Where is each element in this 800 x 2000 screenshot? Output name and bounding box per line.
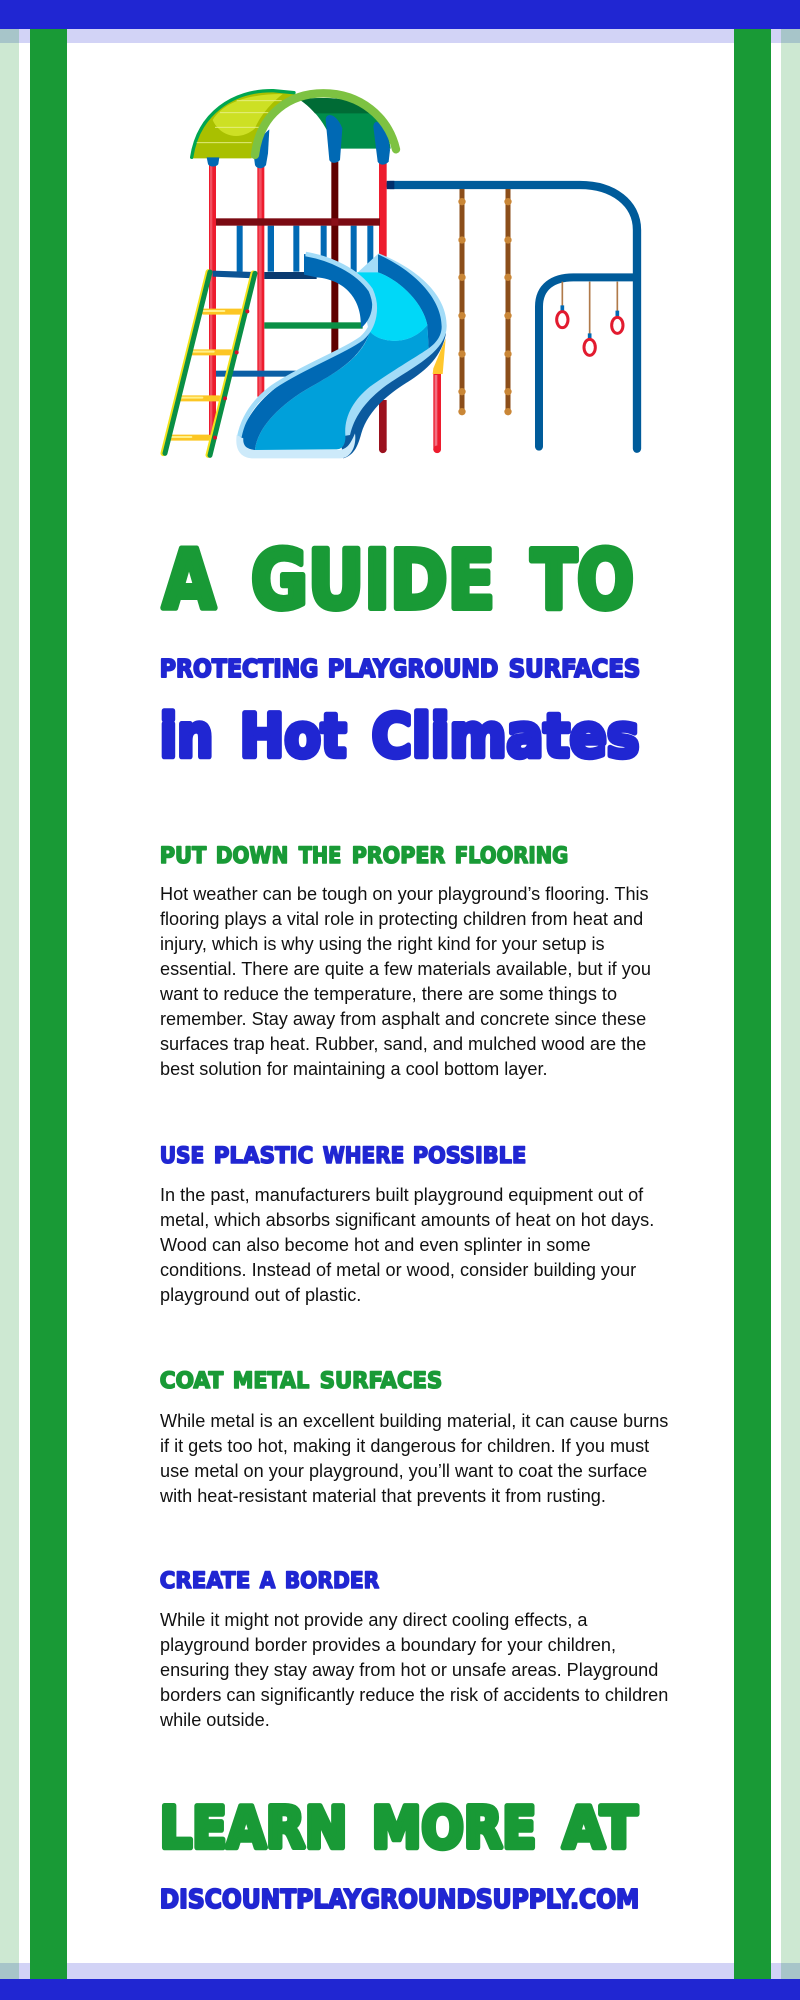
heading: Use plastic where possible <box>160 1143 526 1169</box>
icon: slide <box>236 253 447 458</box>
heading: Put down the proper flooring <box>160 843 568 869</box>
subtitle: Protecting Playground Surfaces: PLAYGROUND <box>328 654 498 683</box>
call to action: Learn more at <box>160 1795 637 1861</box>
text block: flooring: essential. There are quite a few materials available, but if you <box>160 959 651 979</box>
text block: border: while outside. <box>160 1710 270 1730</box>
text block: plastic <box>160 1185 654 1305</box>
heading: Put down the proper flooring: FLOORING <box>455 843 568 869</box>
heading: Put down the proper flooring: THE <box>299 843 341 869</box>
title: in Hot Climates: in <box>160 702 213 771</box>
text block: coat metal: use metal on your playground, you’ll want to coat the surface <box>160 1461 647 1481</box>
text block: coat metal: While metal is an excellent building material, it can cause burns <box>160 1411 668 1431</box>
icon: canopy <box>192 91 396 168</box>
heading: Coat metal surfaces: COAT <box>160 1368 224 1394</box>
heading: Use plastic where possible: PLASTIC <box>214 1143 313 1169</box>
call to action: Learn more at: LEARN <box>160 1795 347 1861</box>
icon: swing frame <box>387 185 637 449</box>
call to action: Learn more at: AT <box>563 1795 637 1861</box>
title: A GUIDE TO: GUIDE <box>251 534 495 628</box>
website address: DISCOUNTPLAYGROUNDSUPPLY.COM <box>160 1885 639 1915</box>
text block: border <box>160 1610 668 1730</box>
text block: plastic: Wood can also become hot and even splinter in some <box>160 1235 591 1255</box>
text block: plastic: In the past, manufacturers built playground equipment out of <box>160 1185 643 1205</box>
text block: coat metal: if it gets too hot, making it dangerous for children. If you must <box>160 1436 649 1456</box>
title: in Hot Climates <box>160 702 639 771</box>
icon: tower posts and rails <box>209 162 441 453</box>
text block: coat metal: with heat-resistant material that prevents it from rusting. <box>160 1486 606 1506</box>
text block: flooring: remember. Stay away from asphalt and concrete since these <box>160 1009 646 1029</box>
text block: flooring: want to reduce the temperature, there are some things to <box>160 984 617 1004</box>
text block: border: playground border provides a boundary for your children, <box>160 1635 616 1655</box>
text block: plastic: playground out of plastic. <box>160 1285 361 1305</box>
text block: border: While it might not provide any direct cooling effects, a <box>160 1610 587 1630</box>
text block: flooring: injury, which is why using the right kind for your setup is <box>160 934 605 954</box>
text block: flooring <box>160 884 651 1079</box>
subtitle: Protecting Playground Surfaces: PROTECTING <box>160 654 318 683</box>
title: in Hot Climates: Hot <box>240 702 346 771</box>
heading: Put down the proper flooring: PROPER <box>352 843 445 869</box>
subtitle: Protecting Playground Surfaces: SURFACES <box>509 654 640 683</box>
text block: flooring: flooring plays a vital role in protecting children from heat and <box>160 909 643 929</box>
title: A GUIDE TO: TO <box>531 534 634 628</box>
subtitle: Protecting Playground Surfaces <box>160 654 640 683</box>
text block: border: ensuring they stay away from hot or unsafe areas. Playground <box>160 1660 658 1680</box>
heading: Coat metal surfaces <box>160 1368 442 1394</box>
heading: Create a border: CREATE <box>160 1568 250 1594</box>
heading: Create a border: BORDER <box>285 1568 379 1594</box>
heading: Put down the proper flooring: PUT <box>160 843 207 869</box>
heading: Create a border: A <box>260 1568 276 1594</box>
heading: Use plastic where possible: WHERE <box>323 1143 404 1169</box>
text block: flooring: best solution for maintaining a cool bottom layer. <box>160 1059 548 1079</box>
icon: ladder <box>163 272 255 455</box>
illustration: playground set <box>163 91 637 458</box>
title: A GUIDE TO: A <box>162 534 216 628</box>
text block: flooring: surfaces trap heat. Rubber, sand, and mulched wood are the <box>160 1034 646 1054</box>
text block: coat metal <box>160 1411 668 1506</box>
heading: Use plastic where possible: POSSIBLE <box>413 1143 526 1169</box>
heading: Put down the proper flooring: DOWN <box>216 843 288 869</box>
heading: Use plastic where possible: USE <box>160 1143 204 1169</box>
title: in Hot Climates: Climates <box>372 702 639 771</box>
text block: border: borders can significantly reduce the risk of accidents to children <box>160 1685 668 1705</box>
text block: plastic: conditions. Instead of metal or wood, consider building your <box>160 1260 636 1280</box>
text block: plastic: metal, which absorbs significant amounts of heat on hot days. <box>160 1210 654 1230</box>
heading: Create a border <box>160 1568 379 1594</box>
title: A GUIDE TO <box>162 534 634 628</box>
heading: Coat metal surfaces: SURFACES <box>320 1368 442 1394</box>
text block: flooring: Hot weather can be tough on your playground’s flooring. This <box>160 884 649 904</box>
heading: Coat metal surfaces: METAL <box>233 1368 309 1394</box>
call to action: Learn more at: MORE <box>372 1795 536 1861</box>
